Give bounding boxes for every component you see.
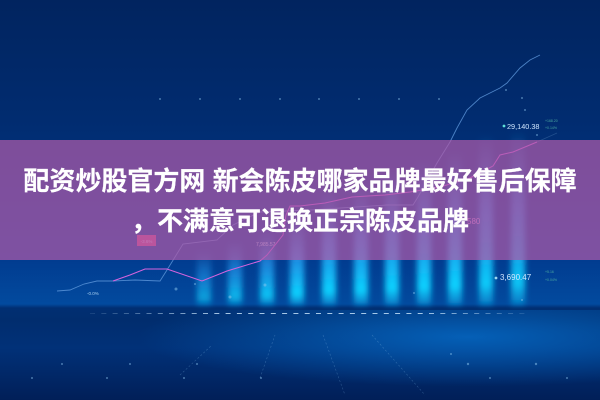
label: 29,140.38: +168.20 [545, 119, 558, 123]
label: 3,690.47: +5.16 [545, 270, 554, 274]
purple banner [0, 140, 600, 260]
light beams [197, 130, 525, 305]
perspective floor lines [180, 335, 425, 395]
label: 29,140.38: +0.14% [545, 126, 557, 130]
label: 29,140.38: 29,140.38 [507, 122, 539, 131]
dashed baseline [90, 312, 530, 314]
tag: pink percentage [137, 235, 156, 246]
line chart: blue trend line [57, 55, 540, 291]
label: 3,690.47: +0.04% [545, 278, 557, 282]
title [23, 166, 577, 236]
star dots [31, 89, 568, 379]
label: 3,690.47 [495, 270, 557, 282]
label: 7,985.57: 7,985.57 [256, 242, 276, 248]
label: 580: 580 [467, 217, 481, 226]
title: ，不满意可退换正宗陈皮品牌 [131, 206, 469, 236]
title: 配资炒股官方网 新会陈皮哪家品牌最好售后保障 [23, 166, 577, 196]
label: 3,690.47: 3,690.47 [500, 273, 532, 282]
line chart: pink line fading tail [537, 133, 557, 142]
line chart: pink trend line [113, 142, 537, 281]
tag: pink percentage: -3.6% [141, 239, 152, 244]
label: percentage: -0.0% [87, 291, 99, 296]
label: 29,140.38 [503, 119, 558, 131]
